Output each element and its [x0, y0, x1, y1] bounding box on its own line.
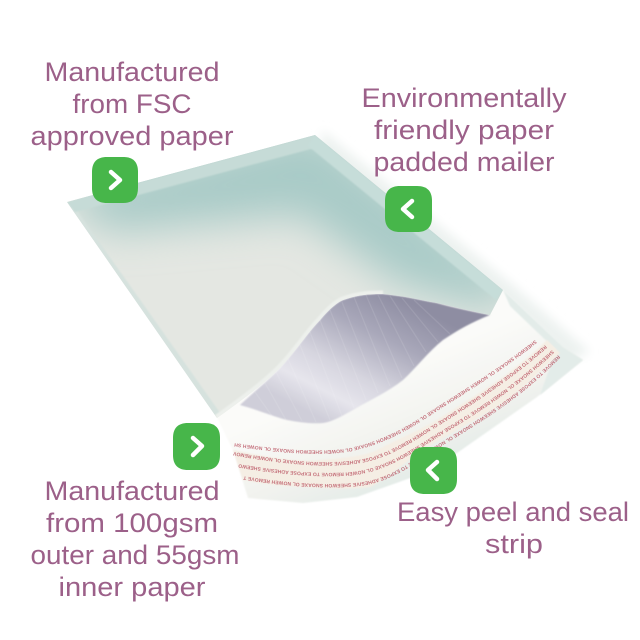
label: peel and seal strip: strip: [485, 529, 543, 559]
label: peel and seal strip: Easy peel and seal: [397, 497, 629, 527]
illustration: paper padded mailer: [67, 135, 585, 503]
flap right edge shading: [503, 290, 583, 395]
peel strip printed text: SHEEWOH SNOAXE OL NOWEH SHEEWOH SNOAXE OL NOWEH SHEEWOH SNOAXE OL NOWEH SHEEWOH SNOAXE OL NOWEH SHEEWOH SNOAXE OL NOWEH: [234, 340, 536, 454]
label: FSC approved paper: approved paper: [30, 121, 234, 151]
icon: green arrow right, bottom left: [173, 423, 220, 470]
mailer lower flap: [217, 290, 583, 503]
bubble lining interior: [240, 294, 490, 423]
left edge seam: [68, 204, 218, 416]
peel strip printed text: REMOVE TO EXPOSE ADHESIVE SHEEWOH SNOAXE OL NOWEH REMOVE TO EXPOSE ADHESIVE SHEEWOH SNOAXE OL NOWEH REMOVE TO EXPOSE ADHESIVE SHEEWOH SNOAXE OL NOWEH: [243, 355, 560, 488]
right edge band: [312, 143, 486, 288]
mailer back halo: [320, 130, 590, 365]
bubble lining ribs: [255, 295, 450, 422]
icon: green arrow left, bottom right: [410, 447, 457, 494]
label: FSC approved paper: [30, 57, 234, 151]
label: environmentally friendly: [362, 83, 567, 177]
label: paper weights: from 100gsm: [46, 508, 218, 538]
icon: green arrow left, top right: [385, 186, 432, 232]
label: FSC approved paper: from FSC: [72, 89, 192, 119]
label: environmentally friendly: padded mailer: [374, 147, 554, 177]
peel strip printed text: REMOVE TO EXPOSE ADHESIVE SHEEWOH SNOAXE OL NOWEH REMOVE TO EXPOSE ADHESIVE SHEEWOH SNOAXE OL NOWEH REMOVE TO EXPOSE ADHESIVE SHEEWOH SNOAXE OL NOWEH: [233, 345, 547, 466]
label: environmentally friendly: Environmentally: [362, 83, 567, 113]
label: paper weights: inner paper: [58, 572, 206, 602]
label: paper weights: [30, 476, 240, 602]
icon: green arrow right, top left: [92, 157, 138, 203]
peel strip printed text: SHEEWOH SNOAXE OL NOWEH REMOVE TO EXPOSE ADHESIVE SHEEWOH SNOAXE OL NOWEH REMOVE TO EXPOSE ADHESIVE SHEEWOH SNOAXE OL NOWEH REMOVE TO EXPOSE ADHESIVE: [238, 350, 554, 476]
label: paper weights: Manufactured: [44, 476, 220, 506]
adhesive peel strip: [233, 340, 560, 489]
top edge band: [68, 139, 310, 212]
label: peel and seal strip: [397, 497, 629, 559]
mailer front body: [67, 135, 503, 418]
peel strip printed text: [233, 340, 560, 488]
teal tint along top and right edges: [60, 125, 520, 310]
label: paper weights: outer and 55gsm: [30, 540, 240, 570]
label: FSC approved paper: Manufactured: [44, 57, 220, 87]
body base paper: [67, 197, 502, 418]
opening lip highlight: [217, 294, 383, 418]
label: environmentally friendly: friendly paper: [374, 115, 554, 145]
